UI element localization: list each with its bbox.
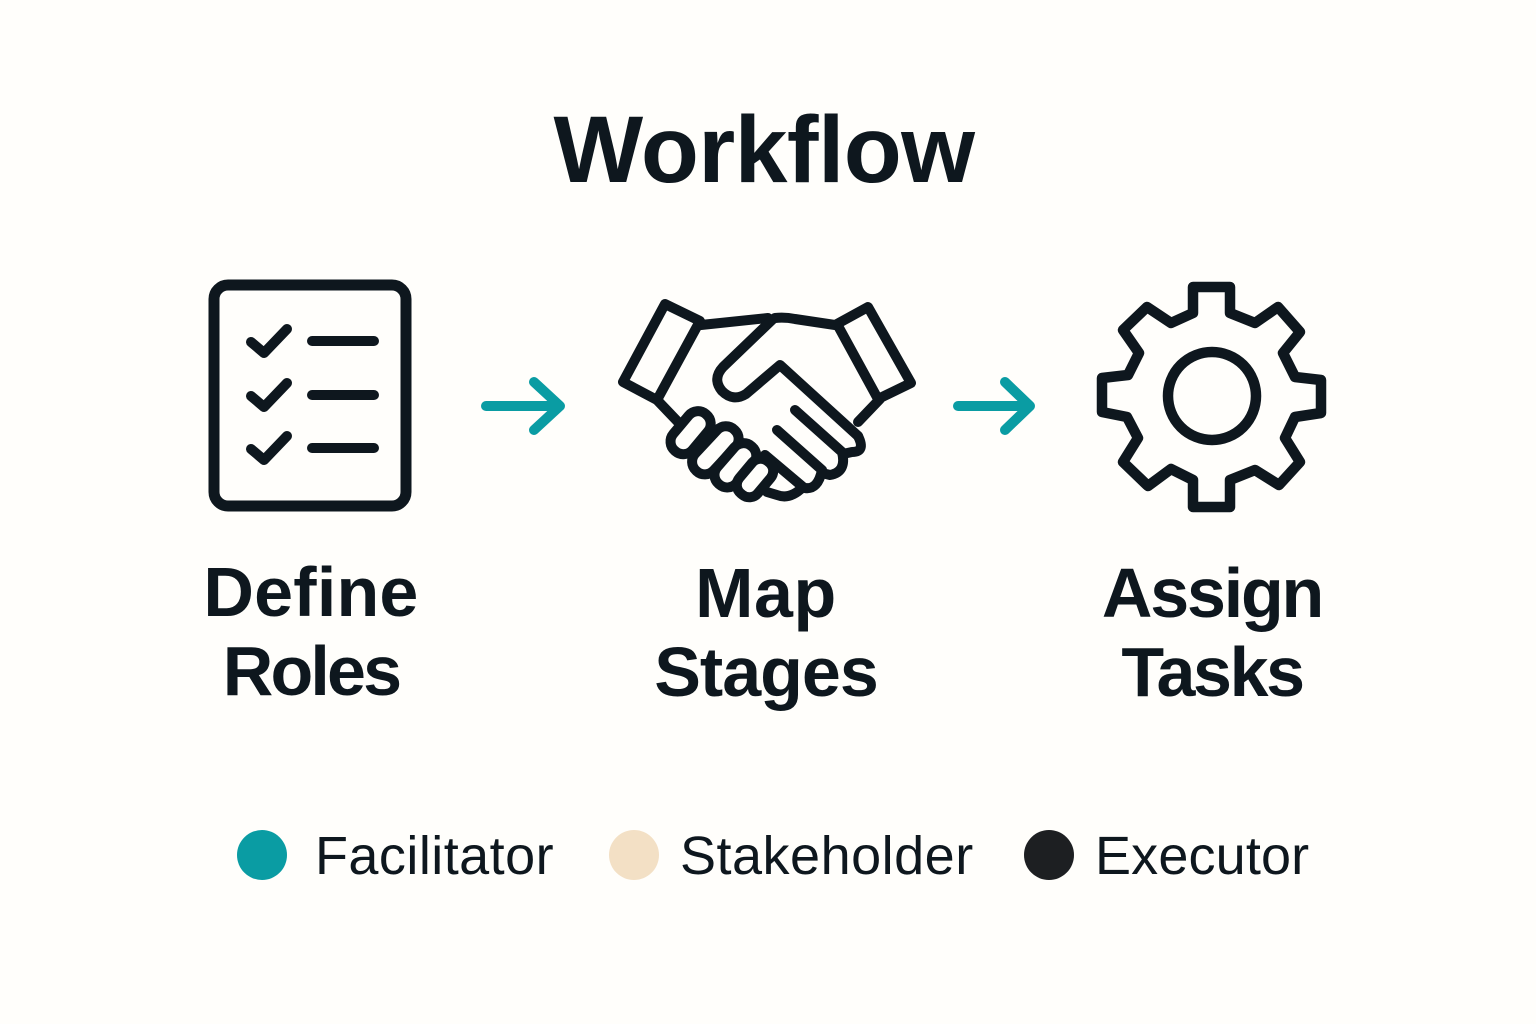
legend dot: Executor [1024,830,1074,880]
label: Map Stages: Stages [654,633,878,711]
label: Assign Tasks: Assign [1102,554,1322,632]
legend label: Facilitator: Facilitator [315,826,554,886]
legend dot: Facilitator [237,830,287,880]
title: Workflow [554,97,974,203]
legend [237,826,1309,886]
label: Define Roles [203,553,419,710]
label: Map Stages [654,554,878,711]
legend label: Stakeholder: Stakeholder [680,826,974,886]
label: Define Roles: Define [203,553,419,631]
label: Define Roles: Roles [223,632,399,710]
label: Map Stages: Map [695,554,837,632]
label: Assign Tasks: Tasks [1121,633,1303,711]
legend dot: Stakeholder [609,830,659,880]
legend label: Executor: Executor [1095,826,1309,886]
label: Assign Tasks [1102,554,1322,711]
